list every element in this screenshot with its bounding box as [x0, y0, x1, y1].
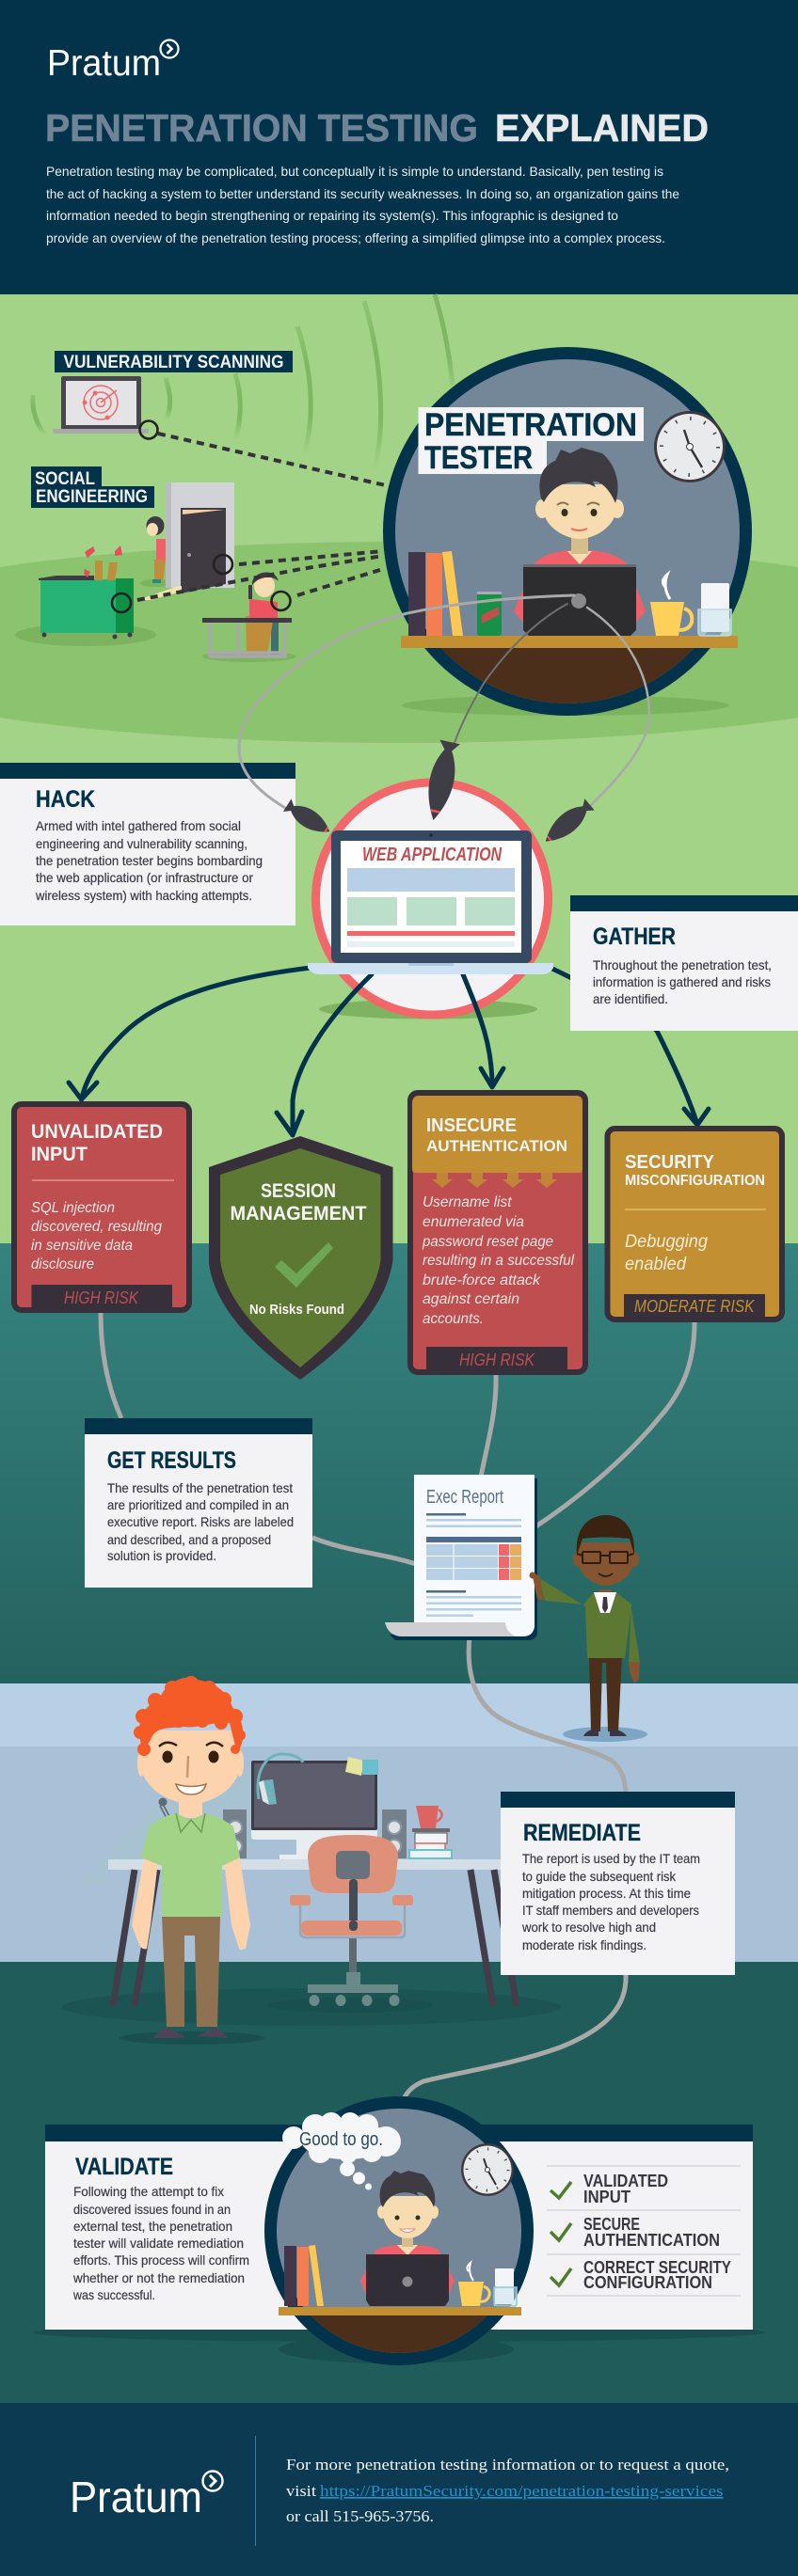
speakers — [223, 1810, 407, 1858]
mug and book stack — [409, 1806, 452, 1858]
intro paragraph: information needed to begin strengthening or repairing its system(s). This infographic is designed to — [46, 208, 618, 223]
checklist: VALIDATED — [583, 2172, 668, 2190]
panel: validate: external test, the penetration — [73, 2219, 232, 2234]
panel: remediate: IT staff members and developers — [522, 1903, 699, 1918]
desk — [108, 1859, 517, 2006]
floor shadows — [62, 1988, 561, 2026]
card: insecure authentication: brute-force attack — [423, 1272, 541, 1288]
exec report document: Exec Report — [426, 1487, 503, 1508]
card: unvalidated input: disclosure — [31, 1256, 94, 1272]
checklist: AUTHENTICATION — [583, 2231, 720, 2250]
title — [45, 106, 709, 150]
target circle — [311, 779, 552, 1019]
target circle shadow — [319, 999, 537, 1019]
card: unvalidated input — [14, 1104, 189, 1310]
panel: gather: GATHER — [593, 924, 676, 950]
panel: validate: VALIDATE — [75, 2154, 173, 2180]
icon: check — [275, 1242, 333, 1288]
laptop — [366, 2254, 449, 2306]
card: session management shield: MANAGEMENT — [230, 1203, 367, 1225]
icon: laptop with radar — [53, 376, 149, 434]
panel: remediate: mitigation process. At this time — [522, 1886, 691, 1901]
clock — [461, 2143, 514, 2196]
footer contact text: For more penetration testing information or to request a quote, — [286, 2456, 729, 2473]
desk — [279, 2307, 521, 2315]
card: session management shield — [209, 1136, 393, 1380]
wall light beam — [72, 1768, 254, 1893]
footer contact text: or call 515-965-3756. — [286, 2507, 434, 2525]
panel: remediate: moderate risk findings. — [522, 1937, 646, 1952]
panel: hack: Armed with intel gathered from social — [36, 818, 241, 833]
panel: gather: Throughout the penetration test, — [593, 957, 772, 972]
checklist: SECURE — [583, 2215, 640, 2234]
card: insecure authentication: HIGH RISK — [459, 1351, 535, 1369]
panel: validate: discovered issues found in an — [73, 2202, 231, 2217]
panel: remediate: work to resolve high and — [521, 1920, 656, 1935]
dumpster — [15, 545, 156, 646]
title plate: penetration tester — [418, 407, 644, 476]
panel: validate: whether or not the remediation — [72, 2270, 245, 2285]
panel: validate: was successful. — [72, 2287, 155, 2302]
title: PENETRATION TESTING — [45, 106, 478, 150]
card: unvalidated input: in sensitive data — [31, 1238, 133, 1254]
panel: validate: Following the attempt to fix — [73, 2184, 224, 2199]
dashed connection lines — [137, 434, 390, 600]
footer divider — [255, 2436, 256, 2546]
hill — [0, 542, 798, 743]
title: EXPLAINED — [495, 106, 709, 150]
panel: hack: wireless system) with hacking attempts. — [35, 888, 252, 903]
panel: remediate — [501, 1792, 735, 1975]
checklist — [547, 2166, 741, 2296]
man in green shirt — [120, 1676, 264, 2045]
sticky notes — [345, 1757, 378, 1776]
panel: remediate: REMEDIATE — [523, 1820, 641, 1846]
checklist: INPUT — [583, 2188, 630, 2206]
card: security misconfiguration: SECURITY — [625, 1152, 715, 1173]
validate shadows — [32, 2323, 766, 2363]
card: security misconfiguration: Debugging — [625, 1232, 708, 1252]
panel: hack: the penetration tester begins bombarding — [36, 853, 263, 868]
panel: get results: The results of the penetration test — [107, 1480, 293, 1495]
office scene — [62, 1676, 561, 2045]
panel: gather — [570, 895, 798, 1031]
tester hair over plate — [539, 448, 617, 503]
bomb centre — [422, 739, 462, 823]
card: security misconfiguration: enabled — [625, 1255, 687, 1274]
arrows to findings — [69, 968, 709, 1135]
footer logo: Pratum: Pratum — [70, 2473, 202, 2521]
books — [284, 2245, 324, 2306]
mug and glass — [458, 2263, 517, 2306]
card: unvalidated input: HIGH RISK — [64, 1288, 139, 1307]
door with person — [137, 482, 234, 600]
web application laptop — [308, 830, 553, 974]
panel: get results: executive report. Risks are labeled — [107, 1514, 294, 1529]
bomb left — [282, 798, 334, 840]
intro paragraph: provide an overview of the penetration testing process; offering a simplified glimpse into a complex process. — [46, 230, 665, 245]
coffee mug — [650, 575, 692, 636]
card: insecure authentication: enumerated via — [423, 1214, 524, 1230]
card: insecure authentication: AUTHENTICATION — [426, 1137, 567, 1155]
thought cloud: Good to go. — [299, 2129, 383, 2150]
card: security misconfiguration: MISCONFIGURATION — [625, 1173, 765, 1189]
small circle: validating tester — [264, 2096, 534, 2365]
card: insecure authentication — [410, 1093, 585, 1372]
panel: hack: HACK — [36, 786, 95, 813]
label: social engineering — [31, 466, 154, 508]
panel: hack: engineering and vulnerability scanning, — [36, 836, 247, 851]
headset — [258, 1754, 303, 1805]
web application laptop: WEB APPLICATION — [362, 845, 502, 865]
books — [408, 551, 463, 636]
label: social engineering: ENGINEERING — [36, 487, 148, 507]
card: insecure authentication: against certain — [423, 1291, 519, 1307]
panel: remediate: to guide the subsequent risk — [522, 1869, 677, 1884]
footer contact text: https://PratumSecurity.com/penetration-testing-services — [320, 2482, 723, 2500]
desk — [401, 636, 738, 648]
ring markers — [112, 421, 290, 612]
card: unvalidated input: INPUT — [31, 1144, 88, 1165]
panel: get results — [85, 1418, 312, 1588]
laptop — [523, 564, 636, 636]
panel: get results: solution is provided. — [107, 1548, 216, 1563]
footer contact text — [286, 2456, 729, 2525]
card: unvalidated input: discovered, resulting — [31, 1219, 162, 1235]
panel: validate — [45, 2125, 753, 2330]
clock — [654, 411, 726, 482]
intro paragraph: the act of hacking a system to better understand its security weaknesses. In doing so, an organization gains the — [46, 186, 679, 201]
big circle: penetration tester — [383, 347, 752, 716]
panel: get results: and described, and a proposed — [107, 1532, 271, 1547]
intro paragraph — [46, 164, 679, 245]
header logo: Pratum: Pratum — [47, 43, 161, 84]
paper in glass — [698, 583, 731, 636]
curly hair — [134, 1676, 246, 1756]
panel: hack — [0, 763, 295, 925]
checklist: CORRECT SECURITY — [583, 2258, 731, 2277]
panel: hack: the web application (or infrastructure or — [36, 870, 253, 885]
card: unvalidated input: SQL injection — [31, 1200, 115, 1216]
card: insecure authentication: resulting in a successful — [423, 1253, 574, 1269]
desk lamp detail — [158, 1798, 171, 1820]
footer contact text: visit — [286, 2482, 316, 2500]
panel: get results: GET RESULTS — [107, 1447, 236, 1474]
title plate: penetration tester: PENETRATION — [424, 407, 637, 443]
chair — [290, 1835, 413, 2006]
card: security misconfiguration: MODERATE RISK — [634, 1297, 755, 1316]
panel: get results: are prioritized and compiled in an — [107, 1497, 289, 1512]
panel: validate: tester will validate remediation — [73, 2236, 244, 2251]
panel: validate: efforts. This process will confirm — [73, 2252, 249, 2268]
soda can — [477, 592, 502, 636]
card: security misconfiguration — [608, 1129, 782, 1320]
label: social engineering: SOCIAL — [35, 469, 95, 489]
grey connectors to report — [101, 1313, 694, 2099]
desk worker on phone — [202, 572, 296, 662]
attack lines from laptop — [239, 595, 649, 808]
monitor — [251, 1761, 377, 1859]
card: insecure authentication: accounts. — [423, 1311, 484, 1327]
thought cloud — [282, 2112, 401, 2189]
card: session management shield: No Risks Found — [249, 1302, 344, 1318]
checklist: CONFIGURATION — [583, 2273, 712, 2292]
card: insecure authentication: Username list — [423, 1194, 512, 1210]
tester figure — [360, 2171, 455, 2297]
panel: gather: are identified. — [593, 991, 668, 1006]
card: insecure authentication: INSECURE — [426, 1115, 517, 1136]
card: unvalidated input: UNVALIDATED — [31, 1121, 163, 1143]
tester figure — [514, 484, 646, 623]
bomb right — [539, 797, 596, 849]
panel: gather: information is gathered and risks — [593, 974, 771, 989]
presenter — [529, 1515, 647, 1742]
signal wave arcs — [33, 294, 453, 470]
card: insecure authentication: password reset page — [422, 1234, 553, 1250]
label: vulnerability scanning: VULNERABILITY SCANNING — [64, 353, 284, 372]
card: session management shield: SESSION — [261, 1180, 336, 1202]
exec report document — [385, 1475, 537, 1640]
intro paragraph: Penetration testing may be complicated, but conceptually it is simple to understand. Basically, pen testing is — [46, 164, 663, 179]
panel: remediate: The report is used by the IT team — [522, 1851, 700, 1866]
title plate: penetration tester: TESTER — [424, 440, 533, 476]
